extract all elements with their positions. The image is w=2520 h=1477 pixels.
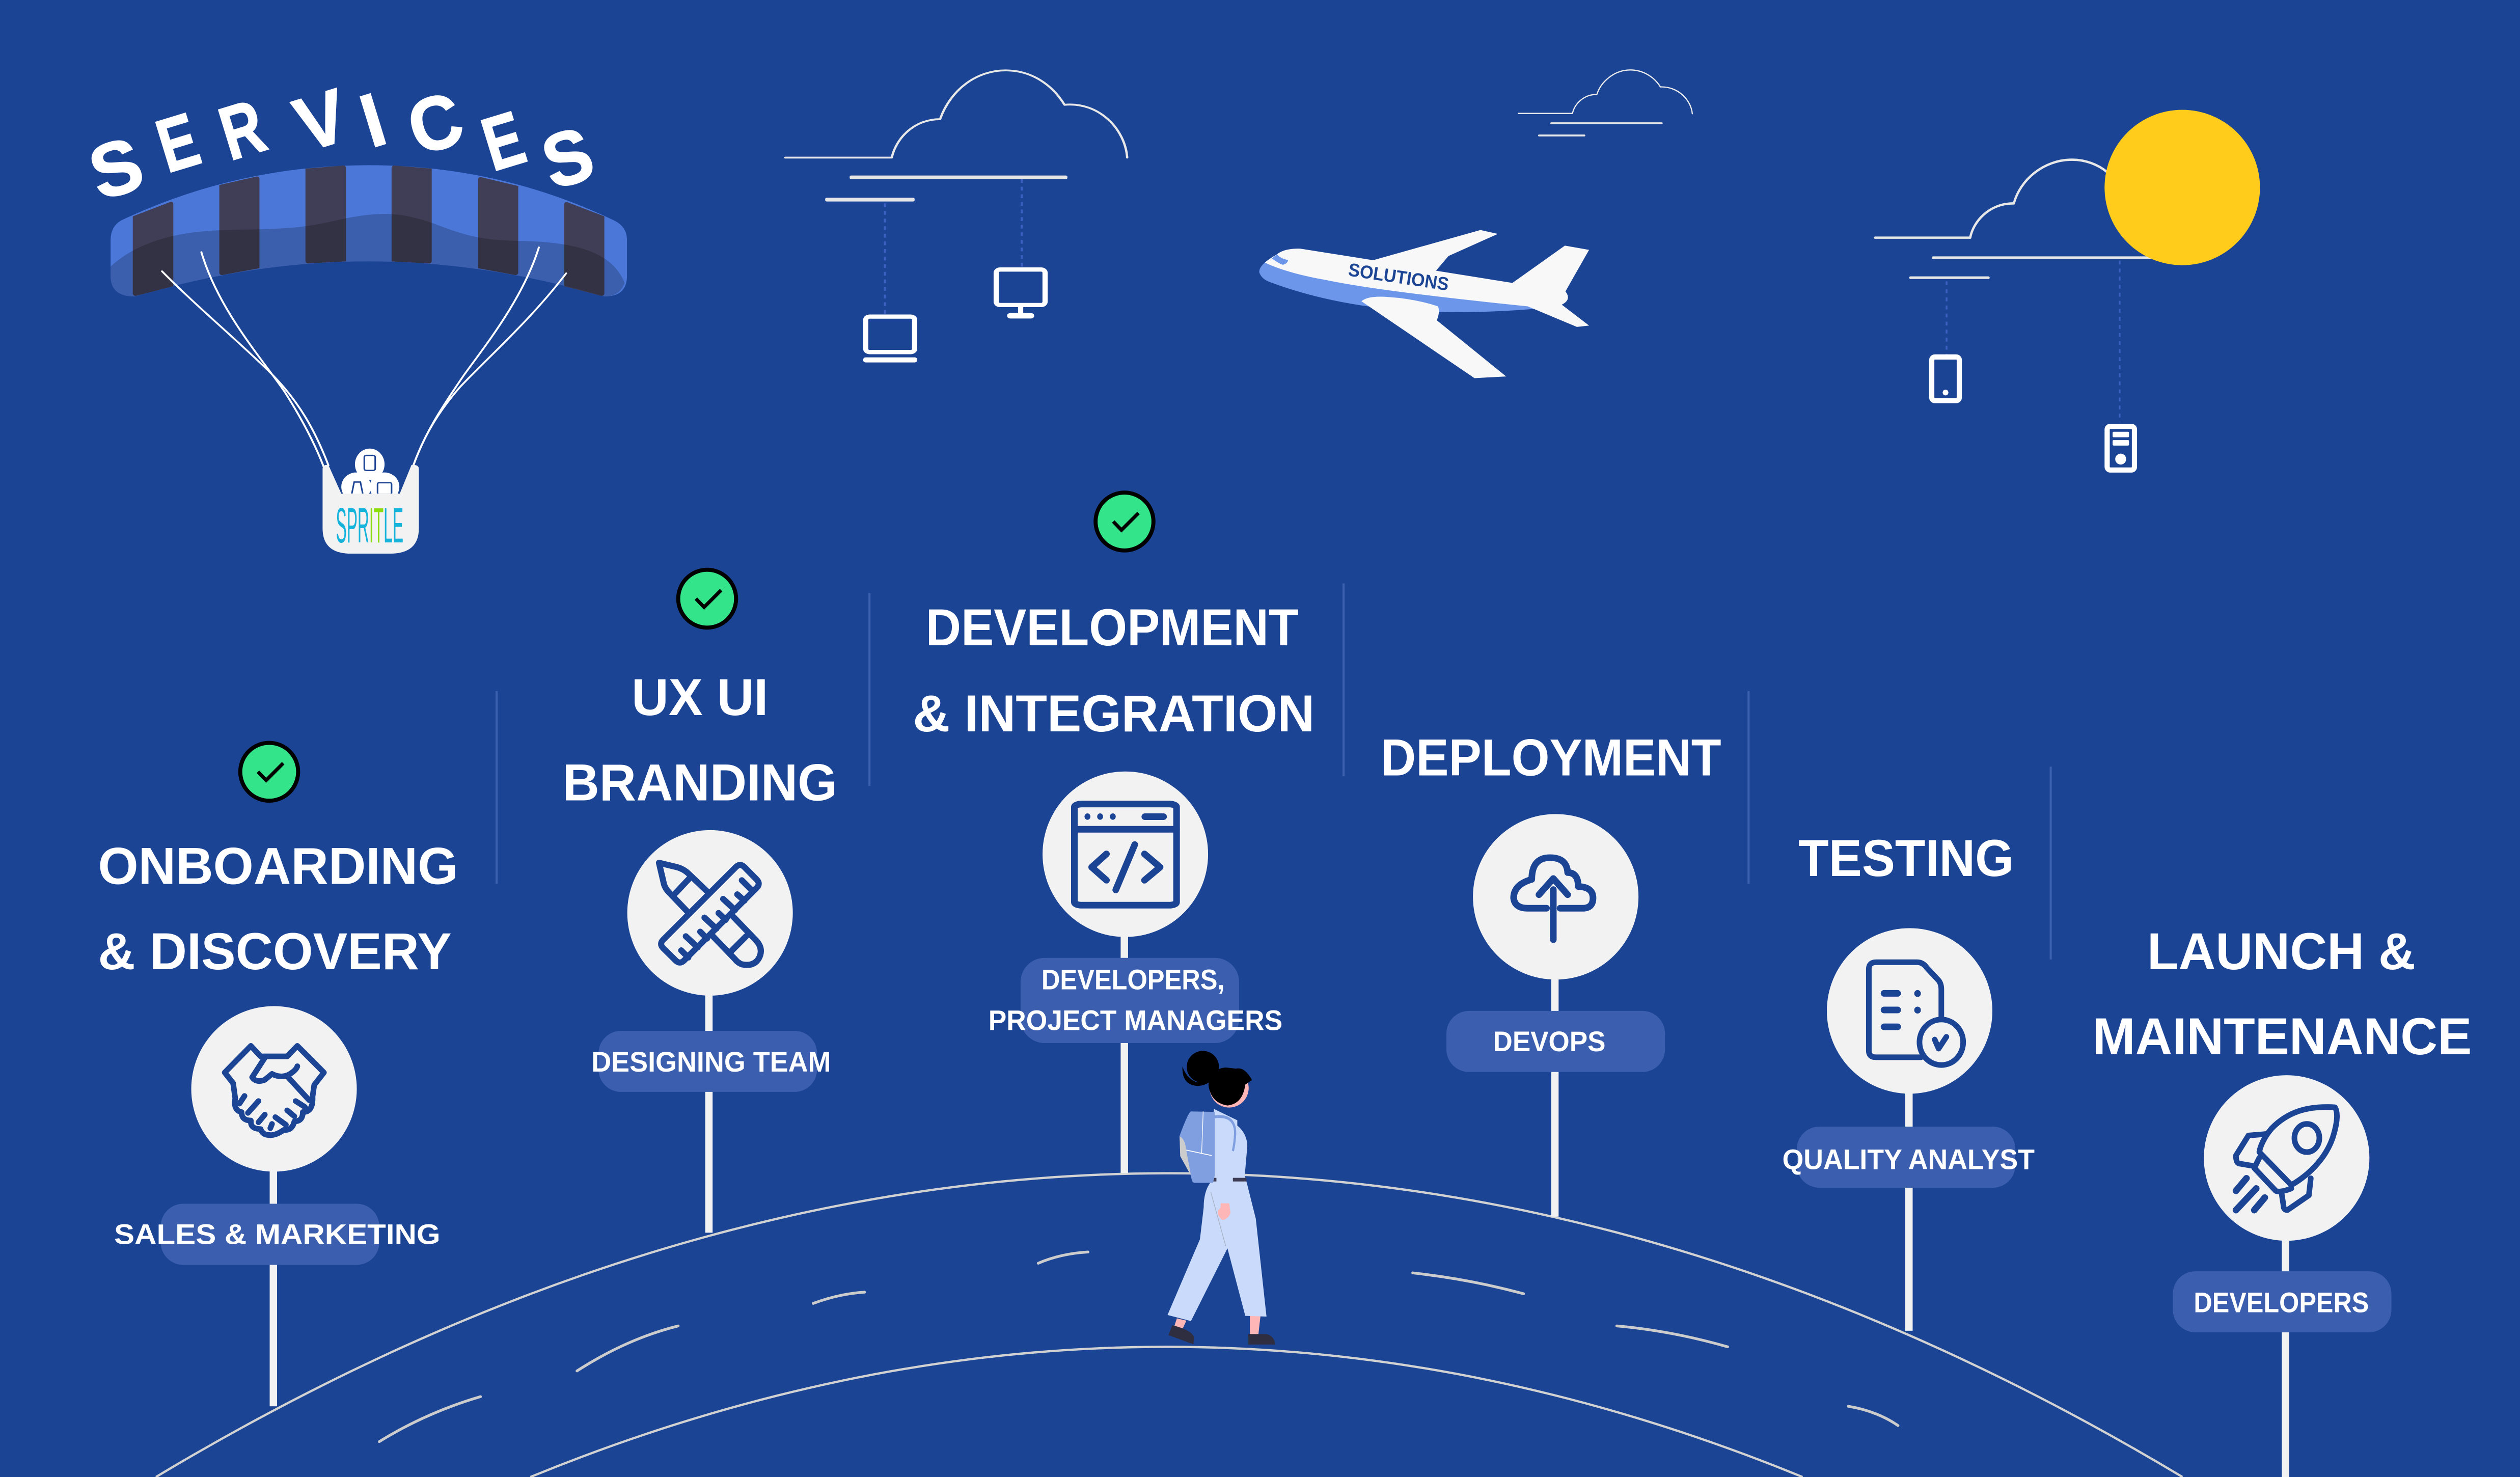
panel: development and integration	[913, 598, 1314, 1173]
airplane label: SOLUTIONS	[1347, 259, 1450, 294]
heading	[2093, 922, 2472, 1065]
parachute title letters: S	[532, 111, 603, 205]
parachute title letters: E	[147, 97, 209, 188]
walking woman with backpack	[1167, 1051, 1275, 1345]
role pill: PROJECT MANAGERS	[989, 1005, 1282, 1036]
icon: sun	[2104, 110, 2260, 265]
icon: cloud upload	[1514, 858, 1593, 940]
hill ground arcs	[156, 1173, 2182, 1477]
parachute logo	[80, 73, 627, 554]
role pill: SALES & MARKETING	[114, 1218, 441, 1250]
role pill	[114, 1204, 441, 1265]
icon: server tower	[2107, 426, 2134, 470]
heading: MAINTENANCE	[2093, 1007, 2472, 1065]
parachute title letters	[80, 73, 603, 216]
heading	[913, 598, 1314, 743]
role pill	[591, 1031, 831, 1092]
status check 1	[240, 743, 298, 801]
icon: laptop	[863, 317, 917, 363]
status check 3	[1095, 493, 1154, 551]
icon: handshake	[225, 1046, 324, 1135]
role pill: QUALITY ANALYST	[1783, 1144, 2035, 1175]
heading: & DISCOVERY	[98, 922, 452, 980]
heading	[562, 668, 837, 811]
icon: pencil and ruler	[659, 863, 761, 965]
parachute title letters: V	[285, 73, 357, 168]
heading: DEVELOPMENT	[926, 598, 1299, 657]
small cloud	[1518, 70, 1692, 135]
role pill	[1446, 1011, 1665, 1072]
status check 2	[678, 570, 736, 627]
panel: deployment	[1381, 728, 1721, 1217]
parachute title letters: S	[80, 121, 153, 216]
parachute title letters: E	[473, 95, 534, 187]
panel: onboarding and discovery	[98, 837, 458, 1406]
panel: ux ui branding	[562, 668, 837, 1233]
icon: code window	[1074, 804, 1176, 905]
role pill: DEVELOPERS,	[1042, 964, 1225, 995]
heading: & INTEGRATION	[913, 684, 1314, 743]
role pill	[1783, 1127, 2035, 1188]
parachute title letters: C	[398, 75, 473, 171]
icon: monitor	[996, 269, 1045, 318]
role pill: DEVOPS	[1493, 1026, 1605, 1057]
role pill: DESIGNING TEAM	[591, 1046, 831, 1078]
role pill	[989, 958, 1282, 1043]
heading: LAUNCH &	[2147, 922, 2416, 980]
role pill	[2173, 1271, 2392, 1332]
panel: testing	[1783, 829, 2035, 1331]
heading	[98, 837, 458, 980]
parachute cords	[162, 248, 566, 467]
parachute title letters: I	[351, 77, 395, 163]
icon: phone	[1932, 357, 1959, 401]
heading: DEPLOYMENT	[1381, 728, 1721, 787]
airplane	[1259, 230, 1589, 378]
parachute canopy	[111, 165, 627, 296]
heading: TESTING	[1798, 829, 2014, 887]
devices in basket	[341, 449, 399, 501]
icon: checklist document	[1869, 962, 1963, 1065]
parachute title letters: R	[210, 84, 275, 176]
Spritle wordmark: SPRITLE	[336, 497, 403, 553]
dividers	[497, 583, 2051, 960]
basket	[322, 465, 419, 554]
role pill: DEVELOPERS	[2194, 1287, 2369, 1319]
heading: UX UI	[632, 668, 768, 726]
heading: BRANDING	[562, 753, 837, 811]
panel: launch and maintenance	[2093, 922, 2472, 1477]
cloud with sun, phone and server	[1875, 110, 2260, 470]
cloud with laptop and monitor	[785, 70, 1127, 363]
icon: rocket	[2236, 1107, 2337, 1210]
heading: ONBOARDING	[98, 837, 458, 895]
